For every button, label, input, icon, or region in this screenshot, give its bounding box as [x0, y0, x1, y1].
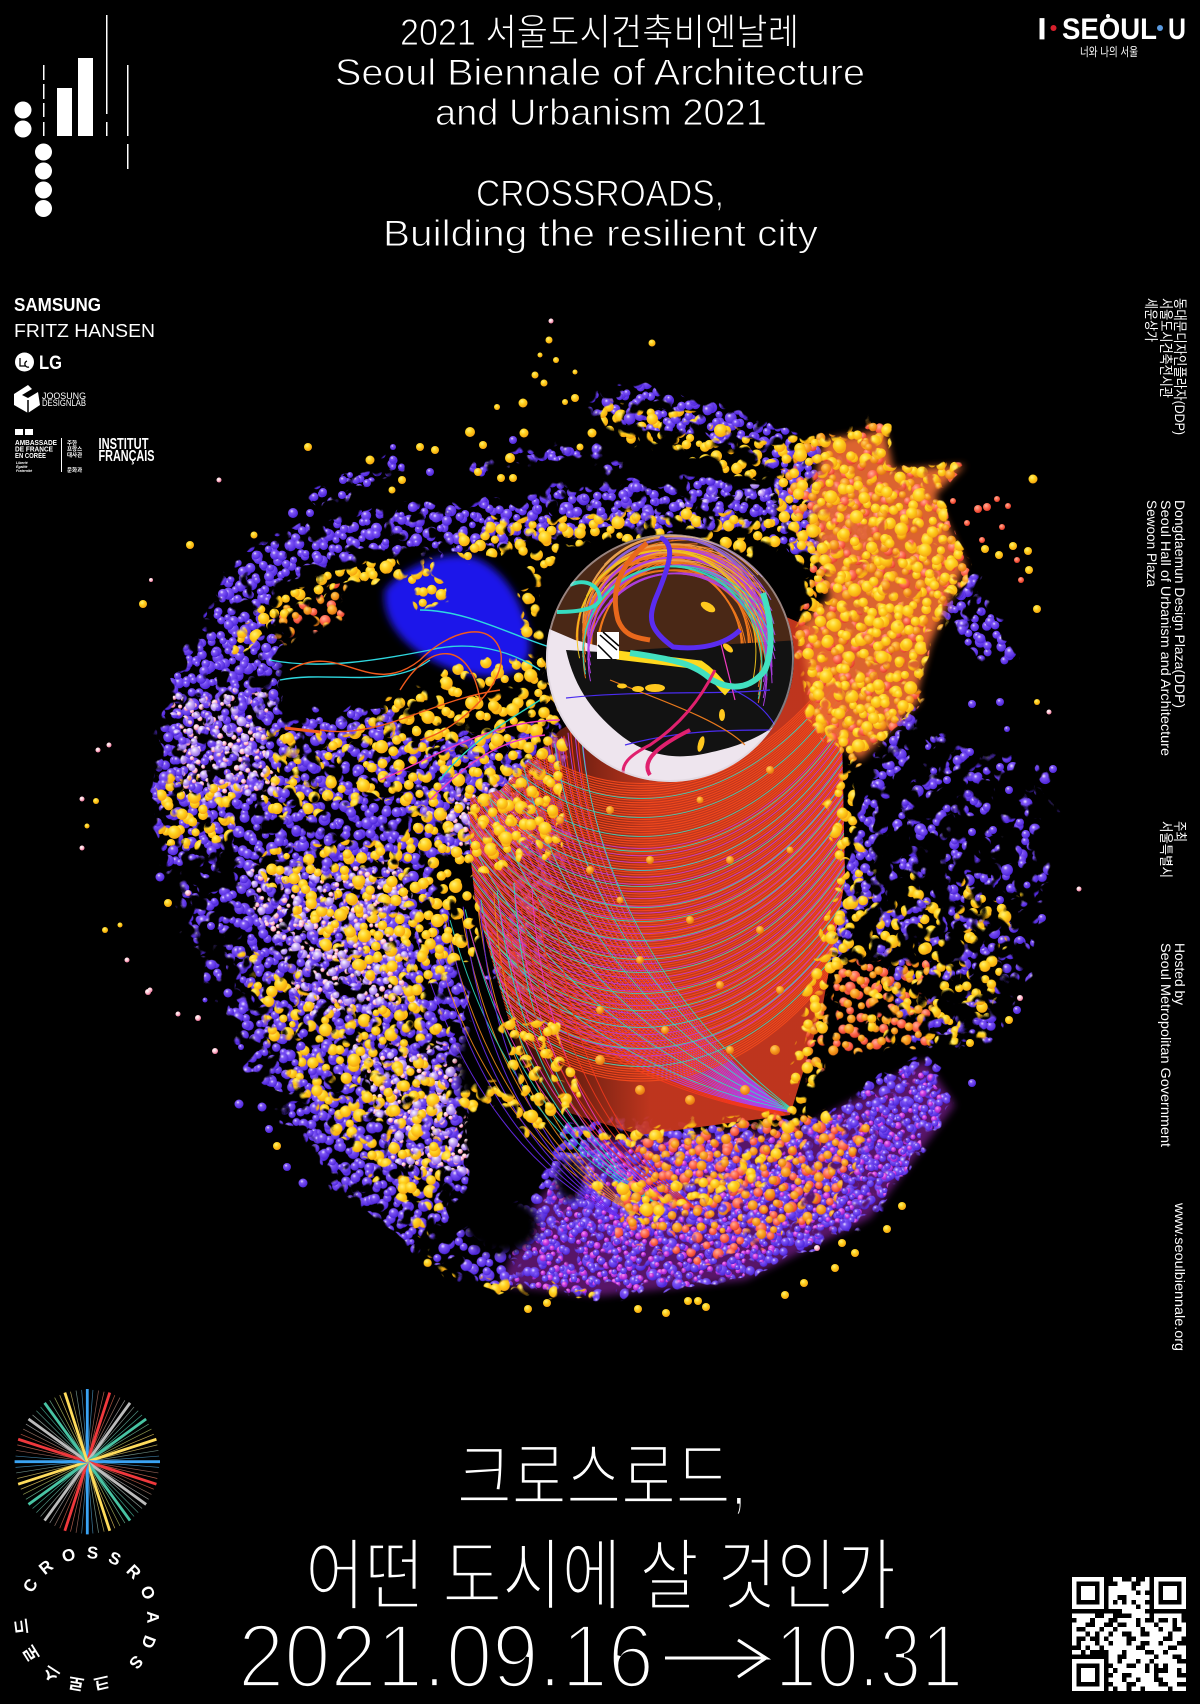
- Ambassade de France: AMBASSADE: [15, 438, 57, 447]
- large Korean headline and dates: [238, 1434, 963, 1704]
- title block: Building the resilient city: [383, 213, 819, 254]
- hand-placed loose purple particles: [156, 436, 1057, 1188]
- starburst emblem: [15, 1389, 160, 1534]
- hand-placed loose yellow particles: [84, 336, 1041, 1317]
- side text: venues and host, rotated: Dongdaemun Design Plaza(DDP): [1172, 500, 1188, 708]
- side text: venues and host, rotated: 세운상가: [1143, 298, 1159, 342]
- orb inner line bundles: [549, 510, 803, 706]
- LG: [15, 352, 62, 374]
- I SEOUL U logo: U: [1168, 13, 1186, 46]
- I SEOUL U logo: I: [1038, 13, 1046, 46]
- circular wordmark: S: [86, 1543, 99, 1563]
- side text: venues and host, rotated: 주최: [1172, 821, 1188, 842]
- orb crescent: [546, 629, 788, 782]
- Joosung Design Lab: JOOSUNG: [42, 391, 86, 401]
- yellow particles: [155, 398, 1024, 1300]
- orb back line bundles: [576, 535, 774, 646]
- purple particles: [150, 382, 1060, 1302]
- loose lines lower left: [416, 883, 759, 1221]
- orb yellow strand: [617, 655, 728, 692]
- title block: Seoul Biennale of Architecture: [335, 52, 865, 93]
- side text: venues and host, rotated: Sewoon Plaza: [1144, 500, 1160, 587]
- blue patch behind orb: [385, 555, 530, 677]
- coral wash under the upper right mass: [800, 430, 965, 760]
- Institut Français: INSTITUT: [98, 436, 149, 453]
- hand-placed loose red particles: [950, 496, 1024, 583]
- Ambassade de France: Fraternité: [16, 469, 32, 473]
- circular wordmark: R: [123, 1561, 145, 1583]
- side text: venues and host, rotated: 서울특별시: [1158, 821, 1174, 878]
- circular wordmark: 드: [12, 1617, 33, 1635]
- circular wordmark: O: [60, 1545, 78, 1566]
- loose coloured lines across the blue patch and left side: [270, 610, 560, 800]
- large Korean headline and dates: 어떤 도시에 살 것인가: [305, 1532, 896, 1620]
- lavender particles: [170, 482, 779, 1178]
- orb lower thin lines: [566, 640, 780, 745]
- circular wordmark: 스: [40, 1661, 63, 1685]
- circular wordmark: 로: [67, 1672, 86, 1694]
- I SEOUL U logo: [1038, 13, 1186, 59]
- circular wordmark: [12, 1543, 162, 1694]
- orb dark interior: [566, 640, 800, 756]
- Ambassade de France: 프랑스: [67, 445, 82, 453]
- funnel of fine coloured lines: [466, 617, 845, 1135]
- artwork: particle sphere with swirling lines and glass orb: [80, 318, 1082, 1317]
- circular wordmark: C: [19, 1575, 42, 1596]
- magenta wash along the lower rim: [500, 1060, 955, 1296]
- side text: venues and host, rotated: 서울도시건축전시관: [1158, 298, 1174, 398]
- circular wordmark: O: [136, 1583, 159, 1603]
- orb glitch reflection: [597, 632, 619, 659]
- title block: and Urbanism 2021: [435, 92, 767, 133]
- title block: 2021 서울도시건축비엔날레: [400, 12, 799, 53]
- side text: venues and host, rotated: Hosted by: [1172, 943, 1188, 1005]
- orb body: [546, 534, 794, 782]
- orb thick purple strand: [651, 537, 740, 648]
- Ambassade de France: 문화과: [67, 466, 82, 474]
- title block: CROSSROADS,: [476, 173, 724, 214]
- Ambassade de France: 주한: [67, 439, 77, 447]
- Ambassade de France: Égalité: [16, 464, 28, 469]
- orb thick orange strand: [615, 543, 650, 640]
- side text: venues and host, rotated: www.seoulbiennale.org: [1172, 1202, 1188, 1351]
- I SEOUL U logo: SEOUL: [1062, 13, 1157, 46]
- Institut Français: [98, 436, 154, 465]
- Ambassade de France: Liberté: [16, 461, 28, 465]
- festival logo: bars, lines and dots: [14, 15, 128, 217]
- circular wordmark: 크: [92, 1671, 111, 1693]
- orb rim: [547, 535, 793, 781]
- circular wordmark: A: [143, 1611, 162, 1623]
- Ambassade de France: [15, 429, 82, 474]
- Ambassade de France: DE FRANCE: [15, 444, 53, 454]
- LG: LG: [39, 353, 62, 374]
- title block: [335, 12, 865, 254]
- Institut Français: FRANÇAIS: [98, 448, 154, 465]
- date arrow: [665, 1640, 766, 1677]
- orange and coral particles: [271, 414, 972, 1266]
- side text: venues and host, rotated: [1143, 298, 1188, 1351]
- Joosung Design Lab: [14, 385, 86, 413]
- side text: venues and host, rotated: 동대문디자인플라자(DDP): [1172, 298, 1188, 435]
- circular wordmark: 로: [20, 1641, 44, 1665]
- large Korean headline and dates: 크로스로드,: [457, 1434, 747, 1522]
- Samsung: SAMSUNG: [14, 295, 101, 315]
- small particles along the lower rim: [506, 1070, 944, 1296]
- QR code: [1072, 1579, 1186, 1689]
- dark gaps in the sphere: [280, 646, 584, 1253]
- I SEOUL U logo: 너와 나의 서울: [1080, 45, 1138, 59]
- glass orb: [546, 534, 794, 782]
- circular wordmark: D: [137, 1633, 160, 1651]
- hand-placed loose pink particles: [80, 318, 1082, 1251]
- circular wordmark: S: [106, 1548, 124, 1570]
- yellow particles scattered over the funnel: [556, 766, 794, 1105]
- side text: venues and host, rotated: Seoul Metropolitan Government: [1158, 943, 1174, 1147]
- Joosung Design Lab: DESIGNLAB: [42, 398, 86, 408]
- colour wash under particles: [148, 402, 1057, 1300]
- orb teal loop: [557, 582, 600, 612]
- Ambassade de France: EN CORÉE: [15, 451, 46, 460]
- orb yellow droplets: [617, 600, 735, 753]
- circular wordmark: S: [125, 1652, 147, 1673]
- orb teal strand: [630, 593, 771, 687]
- orb magenta strand: [623, 670, 715, 780]
- Ambassade de France: 대사관: [67, 451, 82, 459]
- sponsor logos: [14, 295, 155, 474]
- circular wordmark: R: [35, 1556, 57, 1579]
- side text: venues and host, rotated: Seoul Hall of Urbanism and Architecture: [1158, 500, 1174, 756]
- Fritz Hansen: FRITZ HANSEN: [14, 321, 155, 341]
